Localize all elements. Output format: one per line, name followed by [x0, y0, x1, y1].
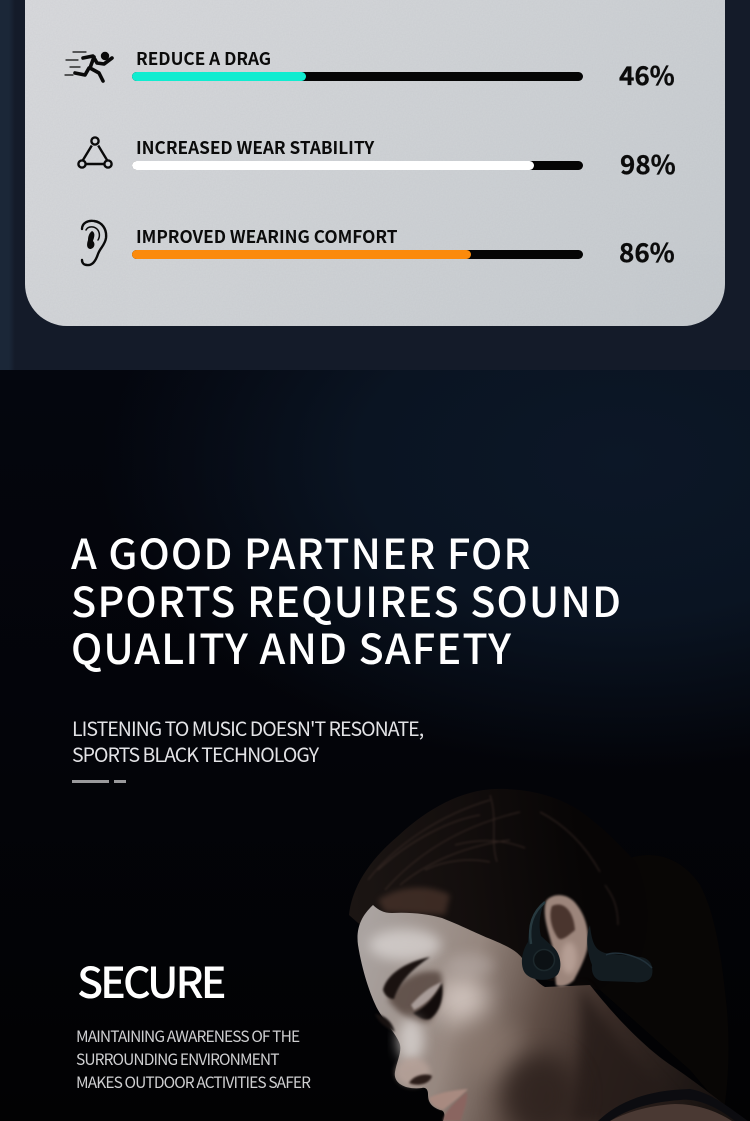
- icon: triangle: [77, 136, 113, 169]
- bar: reduce a drag 46%: [132, 72, 583, 81]
- hair highlights: [368, 795, 618, 925]
- shoulder: [610, 1104, 732, 1121]
- bar fill: white: [132, 161, 534, 170]
- subheading: LISTENING TO MUSIC DOESN'T RESONATE,: [72, 713, 423, 742]
- bottom background: [0, 370, 750, 1121]
- lower cheek tone: [480, 1027, 526, 1076]
- subheading: [72, 713, 424, 768]
- hairline brown: [378, 888, 450, 915]
- heading: SPORTS REQUIRES SOUND: [71, 568, 622, 628]
- icon: ear: [80, 220, 108, 266]
- ear lobe highlight: [561, 942, 577, 974]
- short dash: [114, 780, 126, 783]
- photo: woman wearing bone conduction headphones: [349, 789, 748, 1121]
- ponytail and hair: [349, 789, 620, 981]
- label: reduce a drag: REDUCE A DRAG: [136, 45, 271, 70]
- eye socket: [388, 971, 442, 1023]
- section description: SURROUNDING ENVIRONMENT: [76, 1048, 279, 1070]
- value: 46%: 46%: [619, 56, 675, 93]
- eye lashes: [413, 983, 442, 1020]
- section title: secure: SECURE: [77, 949, 224, 1011]
- value: 98%: 98%: [620, 145, 676, 182]
- ear inner: [550, 904, 575, 939]
- subheading: SPORTS BLACK TECHNOLOGY: [72, 739, 318, 768]
- bra strap: [598, 1089, 748, 1121]
- eyelid: [411, 982, 442, 1010]
- nose bridge highlight: [398, 1018, 424, 1062]
- temple highlight: [446, 953, 494, 977]
- label: increased wear stability: INCREASED WEAR STABILITY: [136, 134, 374, 159]
- panel texture: [25, 0, 725, 326]
- accent dashes: [72, 780, 126, 783]
- ear: [545, 895, 588, 986]
- face and neck: [358, 905, 745, 1121]
- panel: performance stats: [25, 0, 725, 326]
- forehead highlight: [369, 929, 441, 961]
- heading: A GOOD PARTNER FOR: [71, 521, 532, 581]
- heading: QUALITY AND SAFETY: [71, 616, 512, 676]
- headphones: [522, 901, 652, 982]
- jaw shadow: [502, 1053, 578, 1121]
- neck shadow: [576, 992, 632, 1120]
- icon: runner: [64, 51, 114, 83]
- cheek highlight: [436, 976, 488, 1024]
- far eye: [375, 1014, 395, 1032]
- long dash: [72, 780, 109, 783]
- label: improved wearing comfort: IMPROVED WEARING COMFORT: [136, 223, 397, 248]
- bar fill: cyan: [132, 72, 306, 81]
- eyebrow: [383, 957, 430, 999]
- heading: [71, 521, 622, 676]
- lips: [429, 1089, 468, 1110]
- bar: wear stability 98%: [132, 161, 583, 170]
- section description: [76, 1025, 310, 1093]
- value: 86%: 86%: [619, 233, 675, 270]
- nostril: [409, 1074, 432, 1085]
- nose: [396, 1058, 430, 1086]
- top background: [0, 0, 750, 370]
- section description: MAKES OUTDOOR ACTIVITIES SAFER: [76, 1071, 310, 1093]
- bar: wearing comfort 86%: [132, 250, 583, 259]
- bar fill: orange: [132, 250, 471, 259]
- section description: MAINTAINING AWARENESS OF THE: [76, 1025, 299, 1047]
